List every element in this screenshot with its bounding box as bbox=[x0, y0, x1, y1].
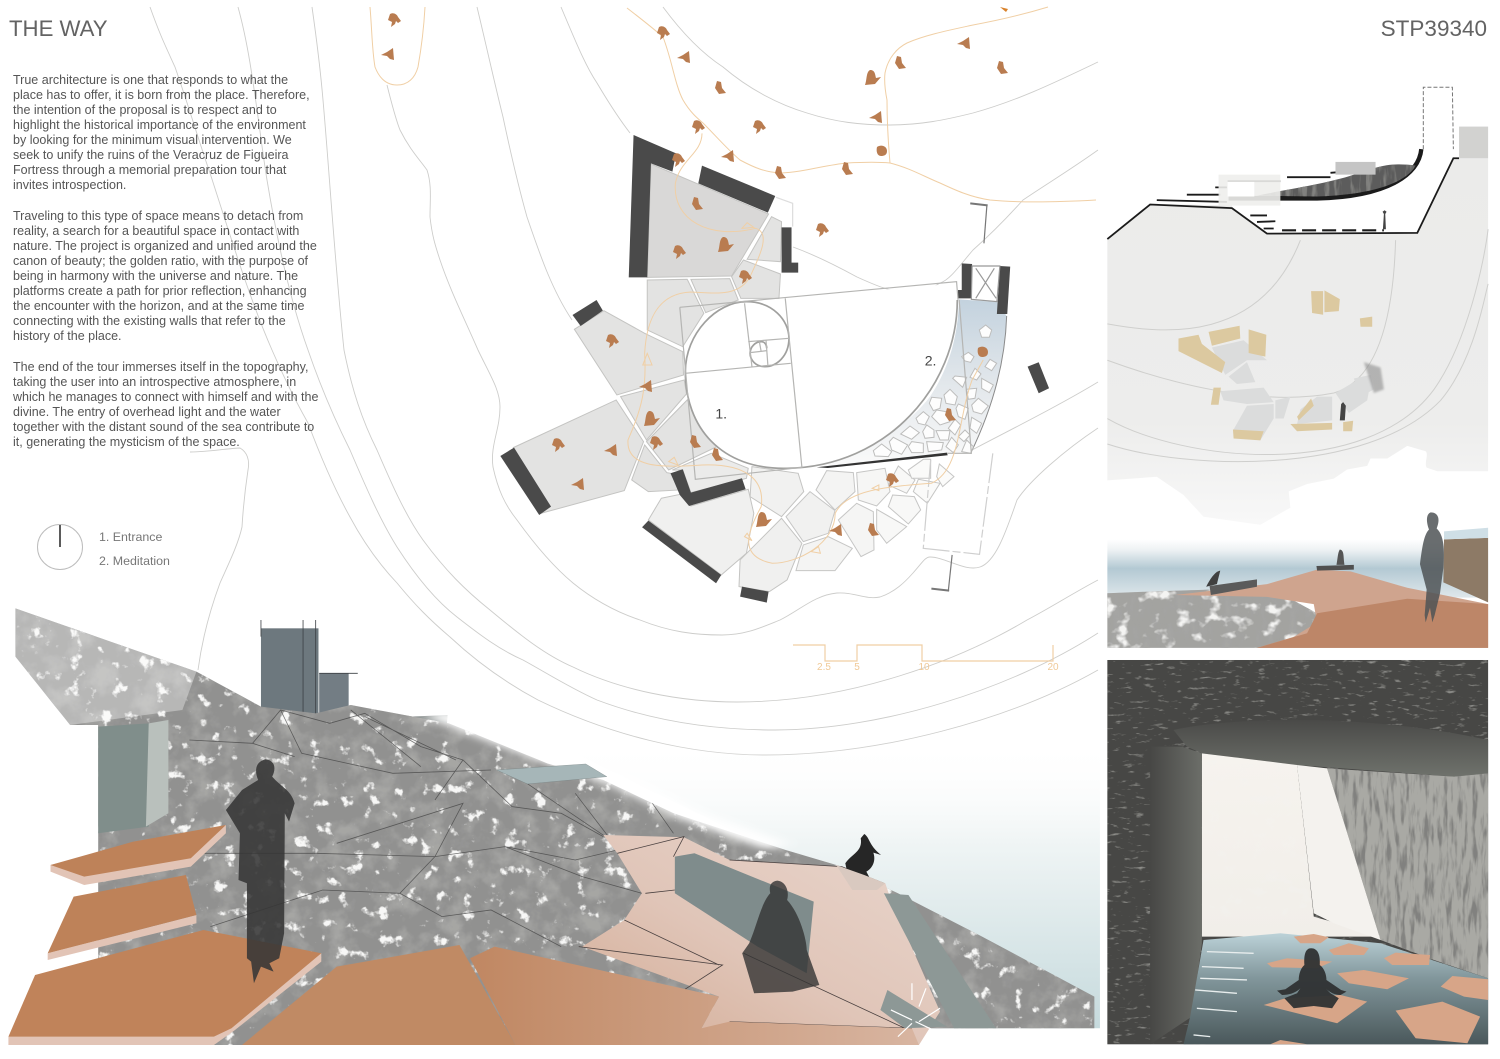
project code: STP39340 bbox=[1381, 16, 1487, 41]
rock facet lines bbox=[189, 710, 673, 947]
stone towers bbox=[261, 620, 448, 737]
bright waterfall wall bbox=[1297, 765, 1381, 940]
rocky hill bbox=[15, 608, 1094, 1045]
description text: connecting with the existing walls that refer to the bbox=[13, 314, 286, 328]
description text: it, generating the mysticism of the space. bbox=[13, 435, 240, 449]
dark walls bbox=[500, 135, 1049, 603]
stepping stones bbox=[1264, 934, 1488, 1044]
pavers and meditation pool bbox=[786, 299, 1007, 571]
left wall bbox=[1150, 747, 1202, 1044]
cave shadow on model bbox=[1364, 362, 1384, 393]
description text: nature. The project is organized and unified around the bbox=[13, 239, 317, 253]
stone wall left bbox=[98, 720, 168, 833]
description text: divine. The entry of overhead light and the water bbox=[13, 405, 281, 419]
light opening bbox=[1202, 753, 1384, 937]
description text: history of the place. bbox=[13, 329, 122, 343]
small orange marker at top bbox=[1000, 7, 1008, 12]
description text: Fortress through a memorial preparation tour that bbox=[13, 163, 287, 177]
scale bar bbox=[793, 645, 1059, 673]
meditating figure bbox=[1277, 948, 1346, 1008]
light ripple marks bbox=[1202, 753, 1314, 917]
pale wash on upper-left rocks bbox=[15, 608, 196, 725]
labels on plan: 1. bbox=[715, 405, 727, 421]
description text: highlight the historical importance of the environment bbox=[13, 118, 306, 132]
visitor markers bbox=[381, 13, 1008, 536]
description text: True architecture is one that responds to what the bbox=[13, 73, 288, 87]
description text: which he manages to connect with himself and with the bbox=[12, 390, 318, 404]
small person in section bbox=[1383, 210, 1387, 229]
grey cantilever platform bbox=[497, 764, 607, 784]
ceiling edge bbox=[1173, 720, 1488, 777]
route lines outside plan bbox=[370, 7, 1096, 202]
stones below pool bbox=[786, 459, 954, 571]
path line through plan bbox=[628, 133, 983, 563]
stone wall on terrace bbox=[675, 853, 814, 973]
terrace foreground slabs bbox=[242, 945, 919, 1045]
model walls in timber tone bbox=[1178, 290, 1372, 440]
cave rock bbox=[1107, 660, 1488, 1044]
legend: 2. Meditation bbox=[99, 554, 170, 568]
terrain mass and coastline bbox=[1107, 158, 1488, 525]
water reflections bbox=[1194, 952, 1254, 1037]
small figure on model bbox=[1340, 402, 1346, 420]
title: THE WAY bbox=[9, 16, 108, 41]
bird perch bbox=[836, 865, 885, 890]
background contour lines bbox=[150, 7, 1098, 755]
description text: together with the distant sound of the sea contribute to bbox=[13, 420, 314, 434]
golden ratio spiral bbox=[680, 282, 971, 479]
description text bbox=[12, 73, 318, 449]
scale bar: 20 bbox=[1047, 662, 1059, 673]
sea haze bbox=[547, 740, 1100, 1028]
site plan bbox=[500, 133, 1049, 603]
description text: platforms create a path for prior reflection, enhancing bbox=[13, 284, 307, 298]
stones inside pool bbox=[873, 325, 997, 457]
description text: canon of beauty; the golden ratio, with the purpose of bbox=[13, 254, 309, 268]
model paving bbox=[1212, 340, 1374, 440]
water bbox=[1184, 933, 1488, 1044]
concrete blocks bbox=[1219, 87, 1488, 206]
bird silhouette bbox=[845, 834, 881, 880]
cave interior view bbox=[1107, 660, 1488, 1044]
ridge fade bbox=[435, 713, 779, 847]
scale bar: 2.5 bbox=[817, 662, 831, 673]
model contour lines bbox=[1107, 229, 1488, 462]
pool gradient bbox=[820, 299, 1007, 467]
labels on plan: 2. bbox=[925, 353, 936, 369]
description text: being in harmony with the universe and nature. The bbox=[13, 269, 298, 283]
white grass bbox=[891, 983, 940, 1037]
coastal photo bbox=[1107, 512, 1488, 648]
pool outer edge bbox=[971, 316, 1007, 453]
description text: the encounter with the horizon, and at the same time bbox=[13, 299, 305, 313]
section void bbox=[1232, 87, 1453, 235]
pink terrace bbox=[579, 835, 940, 1045]
stair and cut marks bbox=[776, 197, 1000, 591]
stone stair bbox=[884, 893, 996, 1028]
labels on plan bbox=[715, 353, 936, 421]
standing figure bbox=[226, 759, 295, 983]
description text: reality, a search for a beautiful space in contact with bbox=[13, 224, 299, 238]
scale bar: 10 bbox=[918, 662, 930, 673]
ink wash in section bbox=[1257, 164, 1416, 196]
description text: Traveling to this type of space means to detach from bbox=[13, 209, 303, 223]
description text: by looking for the minimum visual intervention. We bbox=[13, 133, 292, 147]
right rock face bbox=[1327, 768, 1488, 978]
legend bbox=[38, 524, 170, 570]
description text: the intention of the proposal is to respect and to bbox=[13, 103, 277, 117]
platforms: grey paving bbox=[513, 164, 804, 592]
right column: section and model bbox=[1107, 87, 1488, 648]
description text: taking the user into an introspective atmosphere, in bbox=[13, 375, 296, 389]
scale bar: 5 bbox=[854, 662, 860, 673]
section cut lines bbox=[1107, 149, 1459, 239]
description text: The end of the tour immerses itself in the topography, bbox=[13, 360, 308, 374]
description text: invites introspection. bbox=[13, 178, 126, 192]
seated figure bbox=[742, 881, 819, 993]
legend: 1. Entrance bbox=[99, 530, 162, 544]
description text: seek to unify the ruins of the Veracruz de Figueira bbox=[13, 148, 289, 162]
description text: place has to offer, it is born from the place. Therefore, bbox=[13, 88, 310, 102]
orange stepping platforms bbox=[8, 825, 321, 1045]
main perspective view bbox=[8, 608, 1100, 1045]
white rock highlights bbox=[15, 608, 1094, 1045]
